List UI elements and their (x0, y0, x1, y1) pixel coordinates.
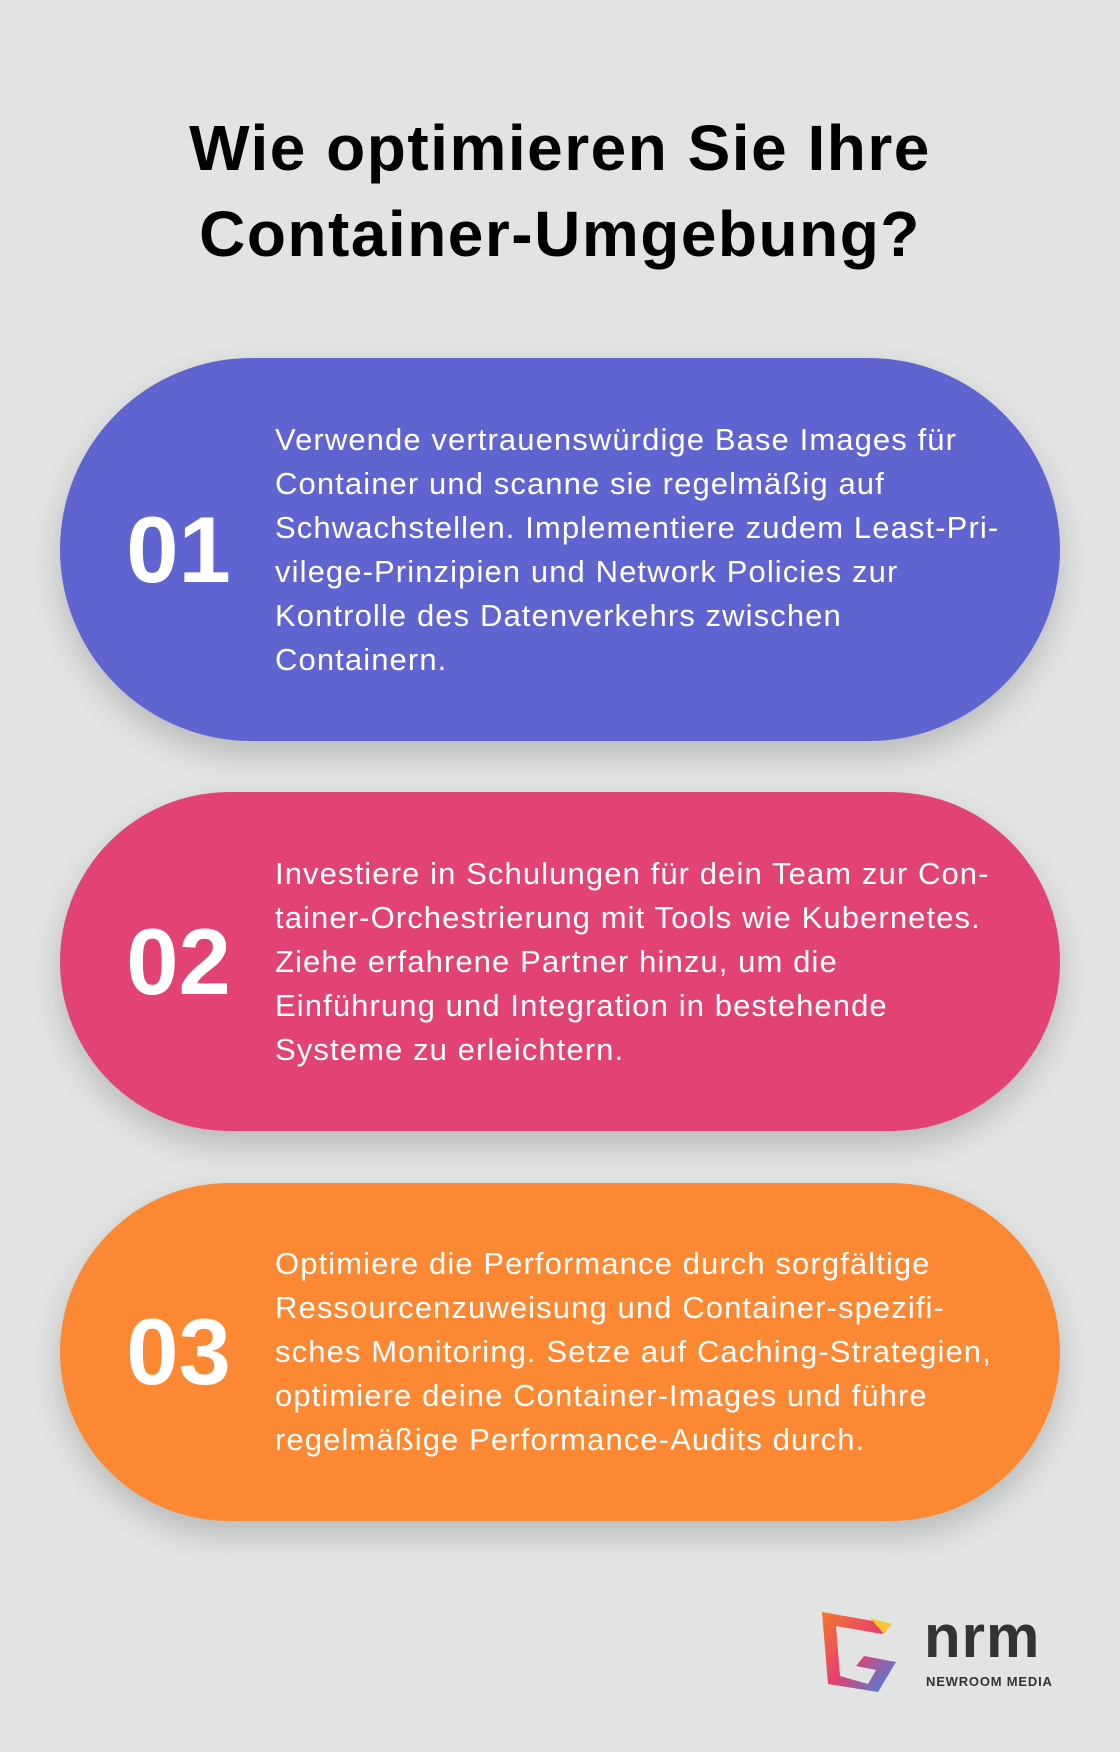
text: step 02: Investiere in Schulungen für dein Team zur Con- (275, 856, 990, 890)
icon: logo mark (822, 1612, 896, 1692)
text: step 02 (275, 856, 990, 1066)
text: step 03 (275, 1246, 992, 1457)
text: step 01 (275, 422, 999, 676)
logo: nrm newroom media (822, 1603, 1053, 1692)
panel: step 02 (60, 792, 1060, 1131)
text: step 03: Ressourcenzuweisung und Container-spezifi- (275, 1290, 945, 1325)
text: step 02: Einführung und Integration in bestehende (275, 988, 888, 1022)
text: step 01: vilege-Prinzipien und Network Policies zur (275, 554, 898, 588)
text: step 01: Kontrolle des Datenverkehrs zwischen (275, 598, 842, 632)
title (189, 112, 931, 270)
text: step 02: tainer-Orchestrierung mit Tools wie Kubernetes. (275, 900, 981, 934)
text: step 01: Container und scanne sie regelmäßig auf (275, 466, 885, 500)
text: step 01: Containern. (275, 642, 447, 676)
number 03: 03 (126, 1299, 231, 1404)
number 02: 02 (126, 908, 231, 1014)
title: Wie optimieren Sie Ihre (189, 112, 931, 184)
panel: step 03 (60, 1183, 1060, 1521)
text: step 03: sches Monitoring. Setze auf Caching-Strategien, (275, 1334, 992, 1369)
title: Container-Umgebung? (199, 198, 921, 270)
text: step 01: Verwende vertrauenswürdige Base Images für (275, 422, 957, 456)
panel: step 01 (60, 358, 1060, 741)
text: step 02: Ziehe erfahrene Partner hinzu, um die (275, 944, 838, 978)
text: step 01: Schwachstellen. Implementiere zudem Least-Pri- (275, 510, 999, 544)
text: nrm: nrm (924, 1603, 1040, 1670)
number 01: 01 (126, 496, 231, 602)
text: step 03: optimiere deine Container-Images und führe (275, 1378, 928, 1413)
text: step 02: Systeme zu erleichtern. (275, 1032, 624, 1066)
text: NEWROOM MEDIA: NEWROOM MEDIA (926, 1674, 1053, 1689)
text: step 03: regelmäßige Performance-Audits durch. (275, 1422, 865, 1457)
text: step 03: Optimiere die Performance durch sorgfältige (275, 1246, 931, 1281)
